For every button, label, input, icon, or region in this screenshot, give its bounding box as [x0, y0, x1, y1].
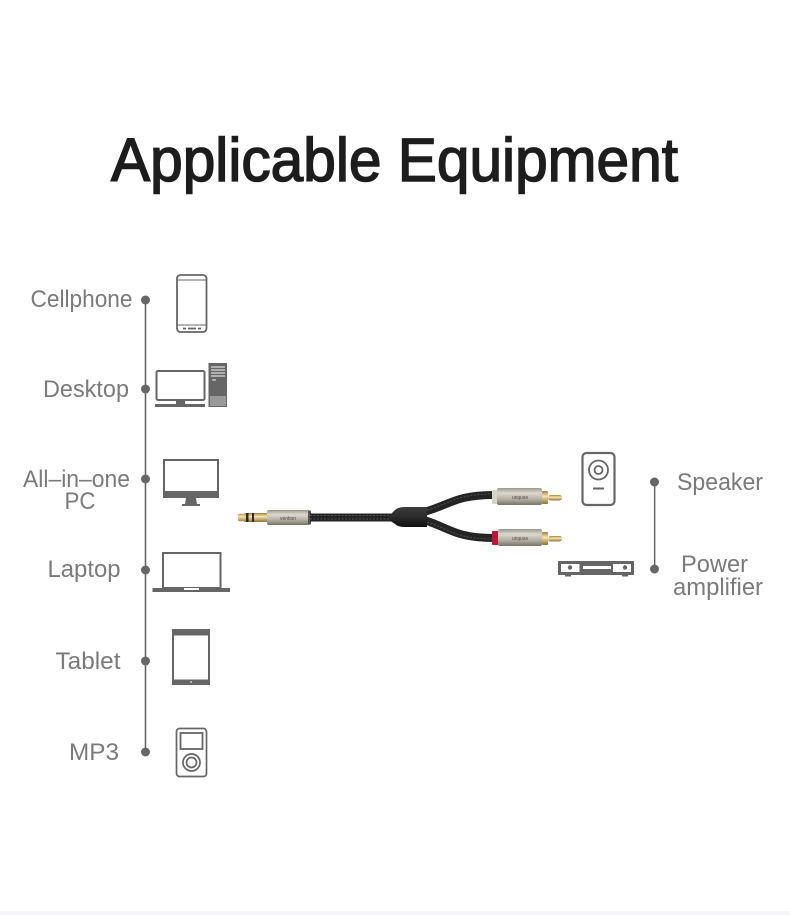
icon: desktop	[155, 363, 227, 407]
label: Speaker: Speaker	[677, 469, 763, 496]
upper and lower branches	[424, 494, 494, 539]
left timeline	[141, 296, 150, 756]
icon: MP3 player	[176, 728, 206, 776]
label: All-in-one PC: All–in–one	[23, 466, 130, 493]
3.5mm plug	[238, 510, 311, 525]
label: Cellphone: Cellphone	[30, 286, 132, 313]
right timeline	[650, 478, 659, 574]
icon: laptop	[152, 552, 230, 592]
3.5mm plug: vention	[280, 516, 296, 522]
braided cable trunk	[310, 514, 392, 522]
lower RCA connector	[492, 529, 562, 546]
label: All-in-one PC: PC	[64, 488, 96, 515]
label: All-in-one PC	[23, 466, 130, 515]
icon: cellphone	[177, 275, 206, 332]
icon: tablet	[172, 629, 210, 685]
icon: all-in-one PC	[163, 459, 219, 506]
label: Power amplifier	[673, 551, 763, 601]
icon: power amplifier	[558, 561, 634, 576]
label: Tablet: Tablet	[56, 648, 121, 675]
label: Power amplifier: Power	[681, 551, 748, 578]
label: Power amplifier: amplifier	[673, 574, 763, 601]
label: Desktop: Desktop	[43, 376, 129, 403]
lower RCA connector: vention	[512, 535, 528, 541]
Y splitter	[389, 507, 427, 527]
label: Laptop: Laptop	[48, 556, 120, 583]
label: MP3: MP3	[69, 739, 119, 766]
upper RCA connector	[492, 488, 562, 505]
upper RCA connector: vention	[512, 494, 528, 500]
icon: speaker	[582, 453, 614, 505]
title: Applicable Equipment	[111, 126, 678, 194]
cable	[238, 488, 562, 546]
bottom edge strip	[0, 911, 790, 915]
